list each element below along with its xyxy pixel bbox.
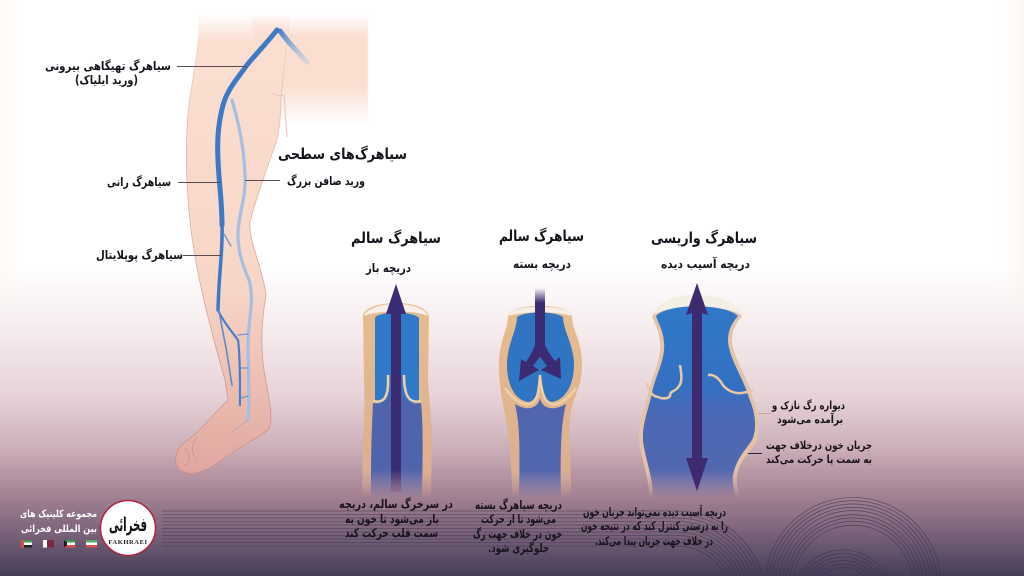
text: closed valve description	[473, 497, 562, 556]
text: open valve description	[339, 496, 453, 540]
text: open valve description: باز می‌شود تا خون به	[345, 512, 439, 527]
flag: Qatar	[43, 540, 54, 548]
bidirectional arrow	[686, 283, 708, 491]
callout: thin wall: برآمده می‌شود	[777, 412, 843, 426]
clinic branding	[20, 500, 156, 556]
leg labels: سیاهرگ پوپلایتال	[96, 247, 183, 263]
subheading: دریچه باز	[365, 261, 411, 275]
callout: reverse flow	[766, 439, 872, 466]
leg labels: (ورید ایلیاک)	[75, 73, 138, 88]
heading: سیاهرگ واریسی	[651, 229, 757, 247]
callout: thin wall: دیواره رگ نازک و	[771, 398, 845, 412]
subheading: دریچه بسته	[513, 257, 571, 271]
hip skin	[250, 14, 368, 125]
leg illustration	[176, 8, 368, 473]
subheading: دریچه آسیب دیده	[661, 256, 750, 271]
text: closed valve description: خون در خلاف جهت رگ	[473, 526, 562, 542]
leg labels: ورید صافن بزرگ	[287, 173, 365, 189]
clinic name: بین المللی فخرائی	[21, 524, 97, 535]
leader lines	[177, 66, 771, 454]
text: closed valve description: دریچه سیاهرگ بسته	[475, 497, 562, 512]
flag: Kuwait	[64, 540, 75, 548]
decorative lines	[162, 497, 940, 576]
leg shape	[176, 14, 290, 473]
leg labels	[45, 58, 365, 263]
inner thigh crease	[271, 93, 287, 137]
heading: سیاهرگ سالم	[351, 229, 441, 247]
closed valve arrow	[519, 288, 561, 381]
heading: superficial veins: سیاهرگ‌های سطحی	[278, 145, 407, 163]
clinic name: مجموعه کلینیک های	[20, 509, 97, 520]
vein drawing	[499, 306, 582, 498]
clinic name	[20, 509, 97, 535]
flag: UAE	[21, 540, 32, 548]
text: varicose description: در خلاف جهت جریان پیدا می‌کند.	[595, 534, 713, 548]
toe creases	[184, 437, 197, 466]
callout: reverse flow: جریان خون درخلاف جهت	[766, 439, 872, 452]
text: closed valve description: جلوگیری شود.	[488, 541, 549, 556]
callout: thin wall	[771, 398, 845, 426]
text: varicose description: را به درستی کنترل کند که در نتیجه خون	[581, 519, 728, 534]
logo badge: فخرائی	[109, 514, 147, 536]
text: open valve description: سمت قلب حرکت کند	[345, 526, 438, 540]
flag: Iran	[86, 540, 97, 548]
leg labels: سیاهرگ رانی	[107, 174, 171, 189]
logo badge	[100, 500, 156, 556]
panel: healthy vein closed valve	[499, 227, 584, 498]
open valve arrow	[386, 284, 406, 492]
vein drawing	[362, 284, 432, 498]
panel: healthy vein open valve	[351, 229, 441, 498]
text: open valve description: در سرخرگ سالم، دریچه	[339, 496, 453, 511]
vein drawing	[639, 295, 758, 498]
veins	[218, 8, 307, 432]
callout: reverse flow: به سمت پا حرکت می‌کند	[766, 453, 872, 466]
logo badge: FAKHRAEI	[108, 539, 148, 546]
panel: varicose vein damaged valve	[639, 229, 872, 498]
leg labels: سیاهرگ تهیگاهی بیرونی	[45, 58, 171, 74]
text: varicose description	[581, 504, 728, 548]
text: varicose description: دریچه آسیب دیده نمی‌تواند جریان خون	[583, 504, 726, 520]
heading: سیاهرگ سالم	[499, 227, 584, 245]
text: closed valve description: می‌شود تا از حرکت	[481, 512, 556, 527]
